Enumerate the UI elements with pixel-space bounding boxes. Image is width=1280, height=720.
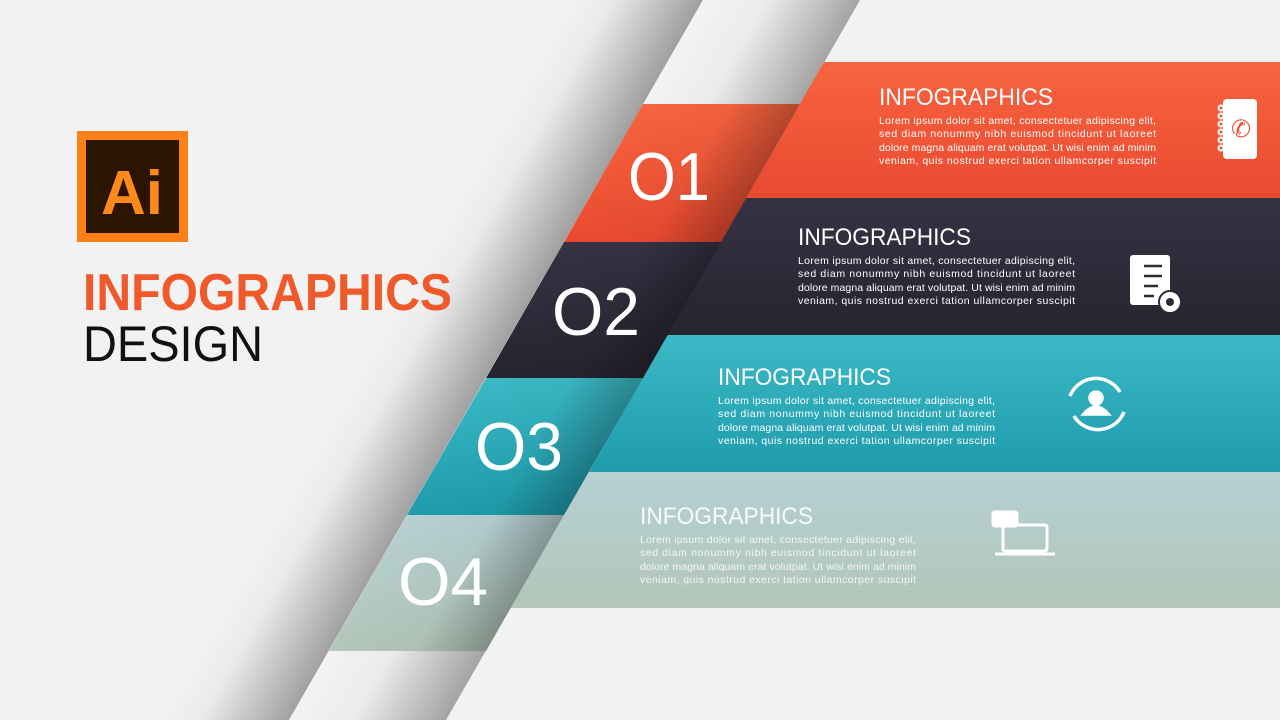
band 3: sed diam nonummy nibh euismod tincidunt ut laoreet (718, 408, 995, 420)
band 4: dolore magna aliquam erat volutpat. Ut wisi enim ad minim (640, 561, 916, 573)
band 1: O1 (628, 139, 710, 215)
band 1: veniam, quis nostrud exerci tation ullamcorper suscipit (879, 155, 1156, 167)
subtitle: DESIGN (83, 316, 263, 372)
band 1: INFOGRAPHICS (879, 84, 1053, 111)
icon: laptop chat (993, 512, 1055, 554)
band 3: veniam, quis nostrud exerci tation ullamcorper suscipit (718, 435, 995, 447)
band 2: dolore magna aliquam erat volutpat. Ut wisi enim ad minim (798, 282, 1075, 294)
band 4: O4 (398, 544, 488, 620)
icon: user sync (1070, 378, 1124, 430)
band 2: veniam, quis nostrud exerci tation ullamcorper suscipit (798, 295, 1075, 307)
band 2: O2 (552, 274, 640, 350)
band 1: sed diam nonummy nibh euismod tincidunt ut laoreet (879, 128, 1156, 140)
diagonal stripe 2 (289, 0, 860, 720)
band 4: Lorem ipsum dolor sit amet, consectetuer adipiscing elit, (640, 534, 916, 546)
icon: phone book: ✆ (1231, 115, 1251, 143)
band 2: sed diam nonummy nibh euismod tincidunt ut laoreet (798, 268, 1075, 280)
Ai logo (77, 131, 188, 242)
title: INFOGRAPHICS (83, 264, 452, 322)
band 4: veniam, quis nostrud exerci tation ullamcorper suscipit (640, 574, 916, 586)
band 1 (564, 62, 1280, 242)
icon: checklist gear (1130, 255, 1181, 313)
band 2: Lorem ipsum dolor sit amet, consectetuer adipiscing elit, (798, 255, 1075, 267)
diagonal stripe 1 (159, 0, 703, 720)
band 3: Lorem ipsum dolor sit amet, consectetuer adipiscing elit, (718, 395, 995, 407)
icon: phone book (1218, 99, 1257, 159)
band 3 (407, 335, 1280, 515)
band 3: INFOGRAPHICS (718, 364, 891, 391)
band 2 (486, 198, 1280, 378)
band 1: dolore magna aliquam erat volutpat. Ut wisi enim ad minim (879, 142, 1156, 154)
band 3: O3 (475, 409, 563, 485)
band 4 (329, 472, 1280, 651)
Ai logo: Ai (101, 159, 163, 228)
band 3: dolore magna aliquam erat volutpat. Ut wisi enim ad minim (718, 422, 995, 434)
band 1: Lorem ipsum dolor sit amet, consectetuer adipiscing elit, (879, 115, 1156, 127)
band 4: INFOGRAPHICS (640, 503, 813, 530)
band 4: sed diam nonummy nibh euismod tincidunt ut laoreet (640, 547, 916, 559)
band 2: INFOGRAPHICS (798, 224, 971, 251)
